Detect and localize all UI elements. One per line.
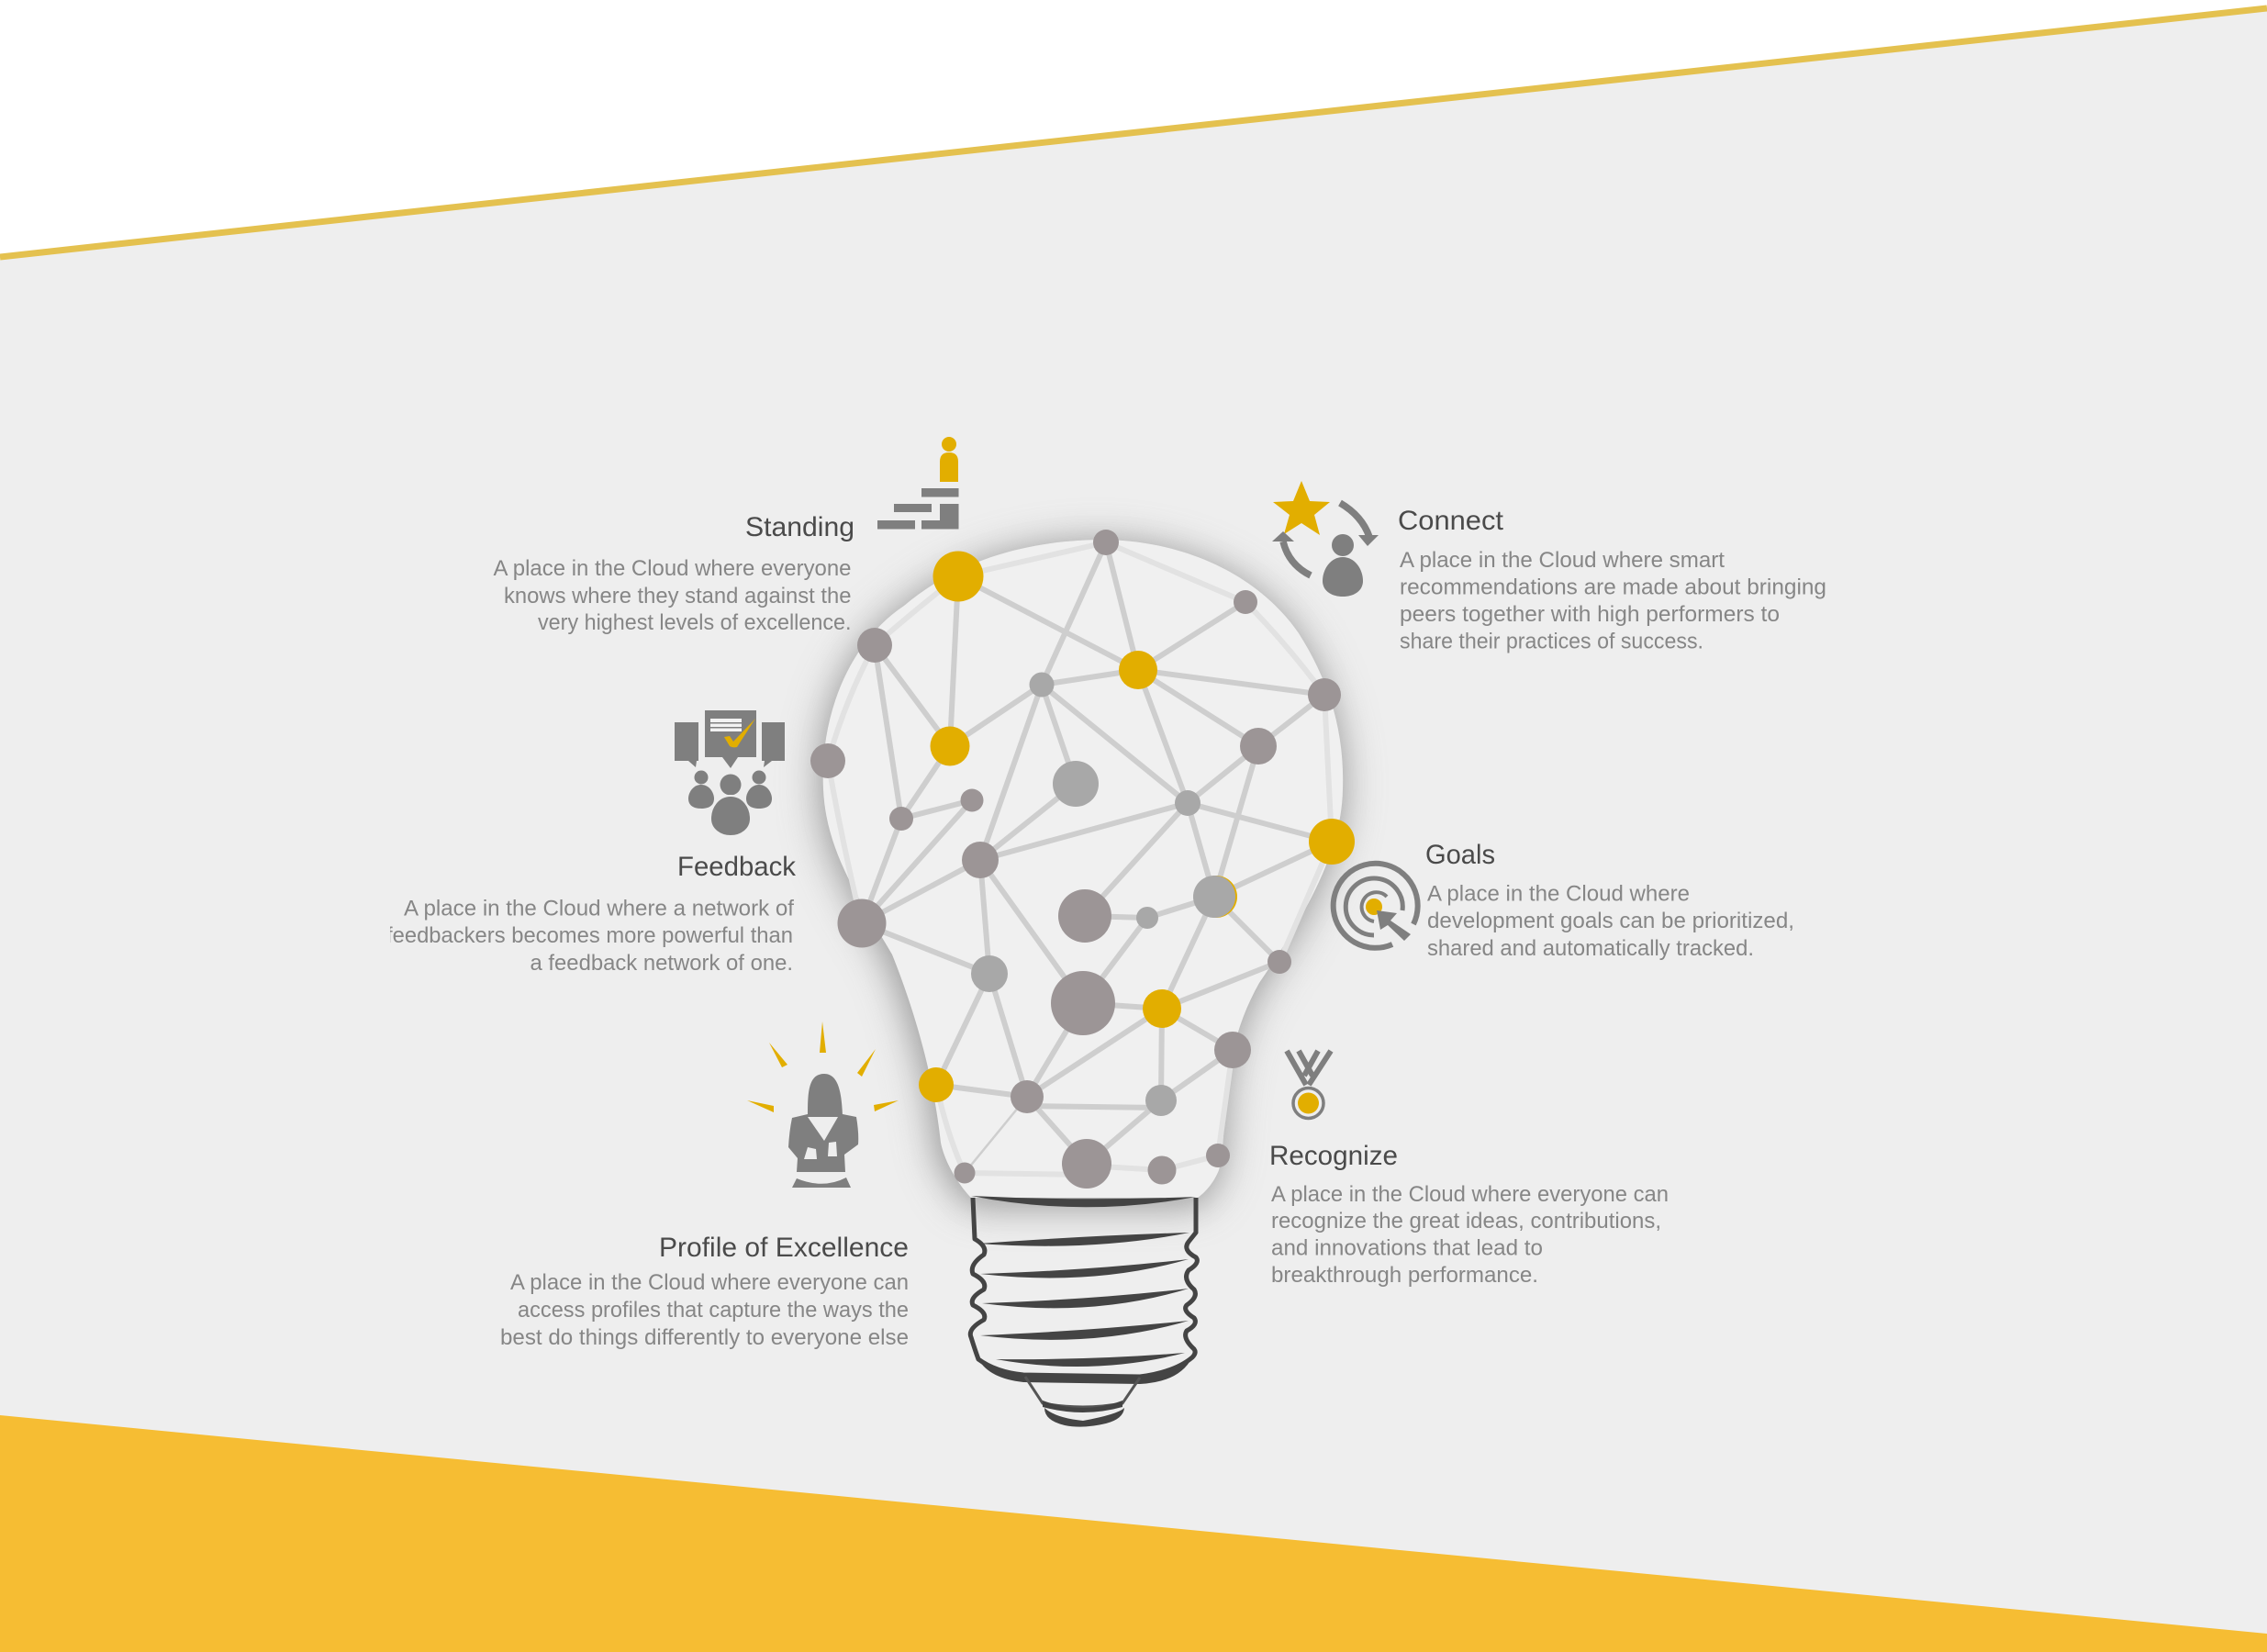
heading: Recognize: Recognize: [1269, 1141, 1398, 1171]
text: Standing description: very highest levels of excellence.: [538, 610, 852, 635]
white top wedge: [0, 0, 2267, 257]
heading: Feedback: Feedback: [677, 852, 797, 882]
text: Feedback description: a feedback network of one.: [530, 951, 793, 976]
outer network edges: [828, 542, 1332, 1175]
text: Profile of Excellence description: [500, 1270, 909, 1350]
text: Profile of Excellence description: best do things differently to everyone else: [500, 1325, 909, 1350]
text: Recognize description: [1271, 1182, 1669, 1288]
bulb screw socket: [970, 1196, 1197, 1427]
text: Goals description: shared and automatically tracked.: [1427, 936, 1754, 961]
bulb soft shadow: [821, 545, 1341, 1203]
text: Connect description: [1400, 548, 1826, 653]
text: Feedback description: feedbackers becomes more powerful than: [386, 923, 793, 948]
text: Connect description: A place in the Cloud where smart: [1400, 548, 1725, 573]
light bulb illustration: [810, 530, 1355, 1427]
heading: Connect: Connect: [1398, 506, 1504, 536]
text: Profile of Excellence description: A place in the Cloud where everyone can: [510, 1270, 909, 1295]
text: Goals description: development goals can be prioritized,: [1427, 909, 1794, 933]
bulb glass: [823, 540, 1343, 1198]
icon: profile silhouette with rays: [747, 1021, 899, 1188]
text: Connect description: peers together with high performers to: [1400, 602, 1780, 627]
text: Standing description: [494, 556, 852, 635]
text: Feedback description: [390, 899, 794, 970]
text: Recognize description: and innovations that lead to: [1271, 1235, 1543, 1261]
text: Recognize description: A place in the Cloud where everyone can: [1271, 1182, 1669, 1207]
text: Recognize description: breakthrough performance.: [1271, 1263, 1538, 1288]
icon: recognize medal: [1287, 1051, 1331, 1118]
text: Standing description: knows where they stand against the: [504, 584, 852, 608]
yellow bottom wedge: [0, 1415, 2267, 1652]
network nodes: [810, 530, 1355, 1189]
text: Standing description: A place in the Cloud where everyone: [494, 556, 852, 581]
text: Connect description: recommendations are made about bringing: [1400, 575, 1826, 600]
bulb tight shadow: [823, 540, 1343, 1207]
text: Profile of Excellence description: access profiles that capture the ways the: [518, 1298, 909, 1323]
heading: Profile of Excellence: Profile of Excellence: [659, 1233, 909, 1263]
text: Goals description: [1427, 881, 1794, 961]
text: Connect description: share their practices of success.: [1400, 630, 1703, 653]
text: Feedback description: A place in the Cloud where a network of: [404, 896, 794, 921]
icon: feedback speech bubbles and people: [675, 710, 785, 836]
yellow diagonal line: [0, 8, 2267, 257]
icon: standing podium with person: [877, 437, 958, 529]
icon: goals target with cursor: [1334, 864, 1418, 948]
text: Goals description: A place in the Cloud where: [1427, 881, 1690, 907]
heading: Goals: Goals: [1425, 840, 1495, 870]
text: Recognize description: recognize the great ideas, contributions,: [1271, 1209, 1661, 1233]
icon: connect star, arrows and person: [1272, 481, 1379, 597]
inner network edges: [862, 542, 1332, 1173]
heading: Standing: Standing: [745, 512, 854, 542]
